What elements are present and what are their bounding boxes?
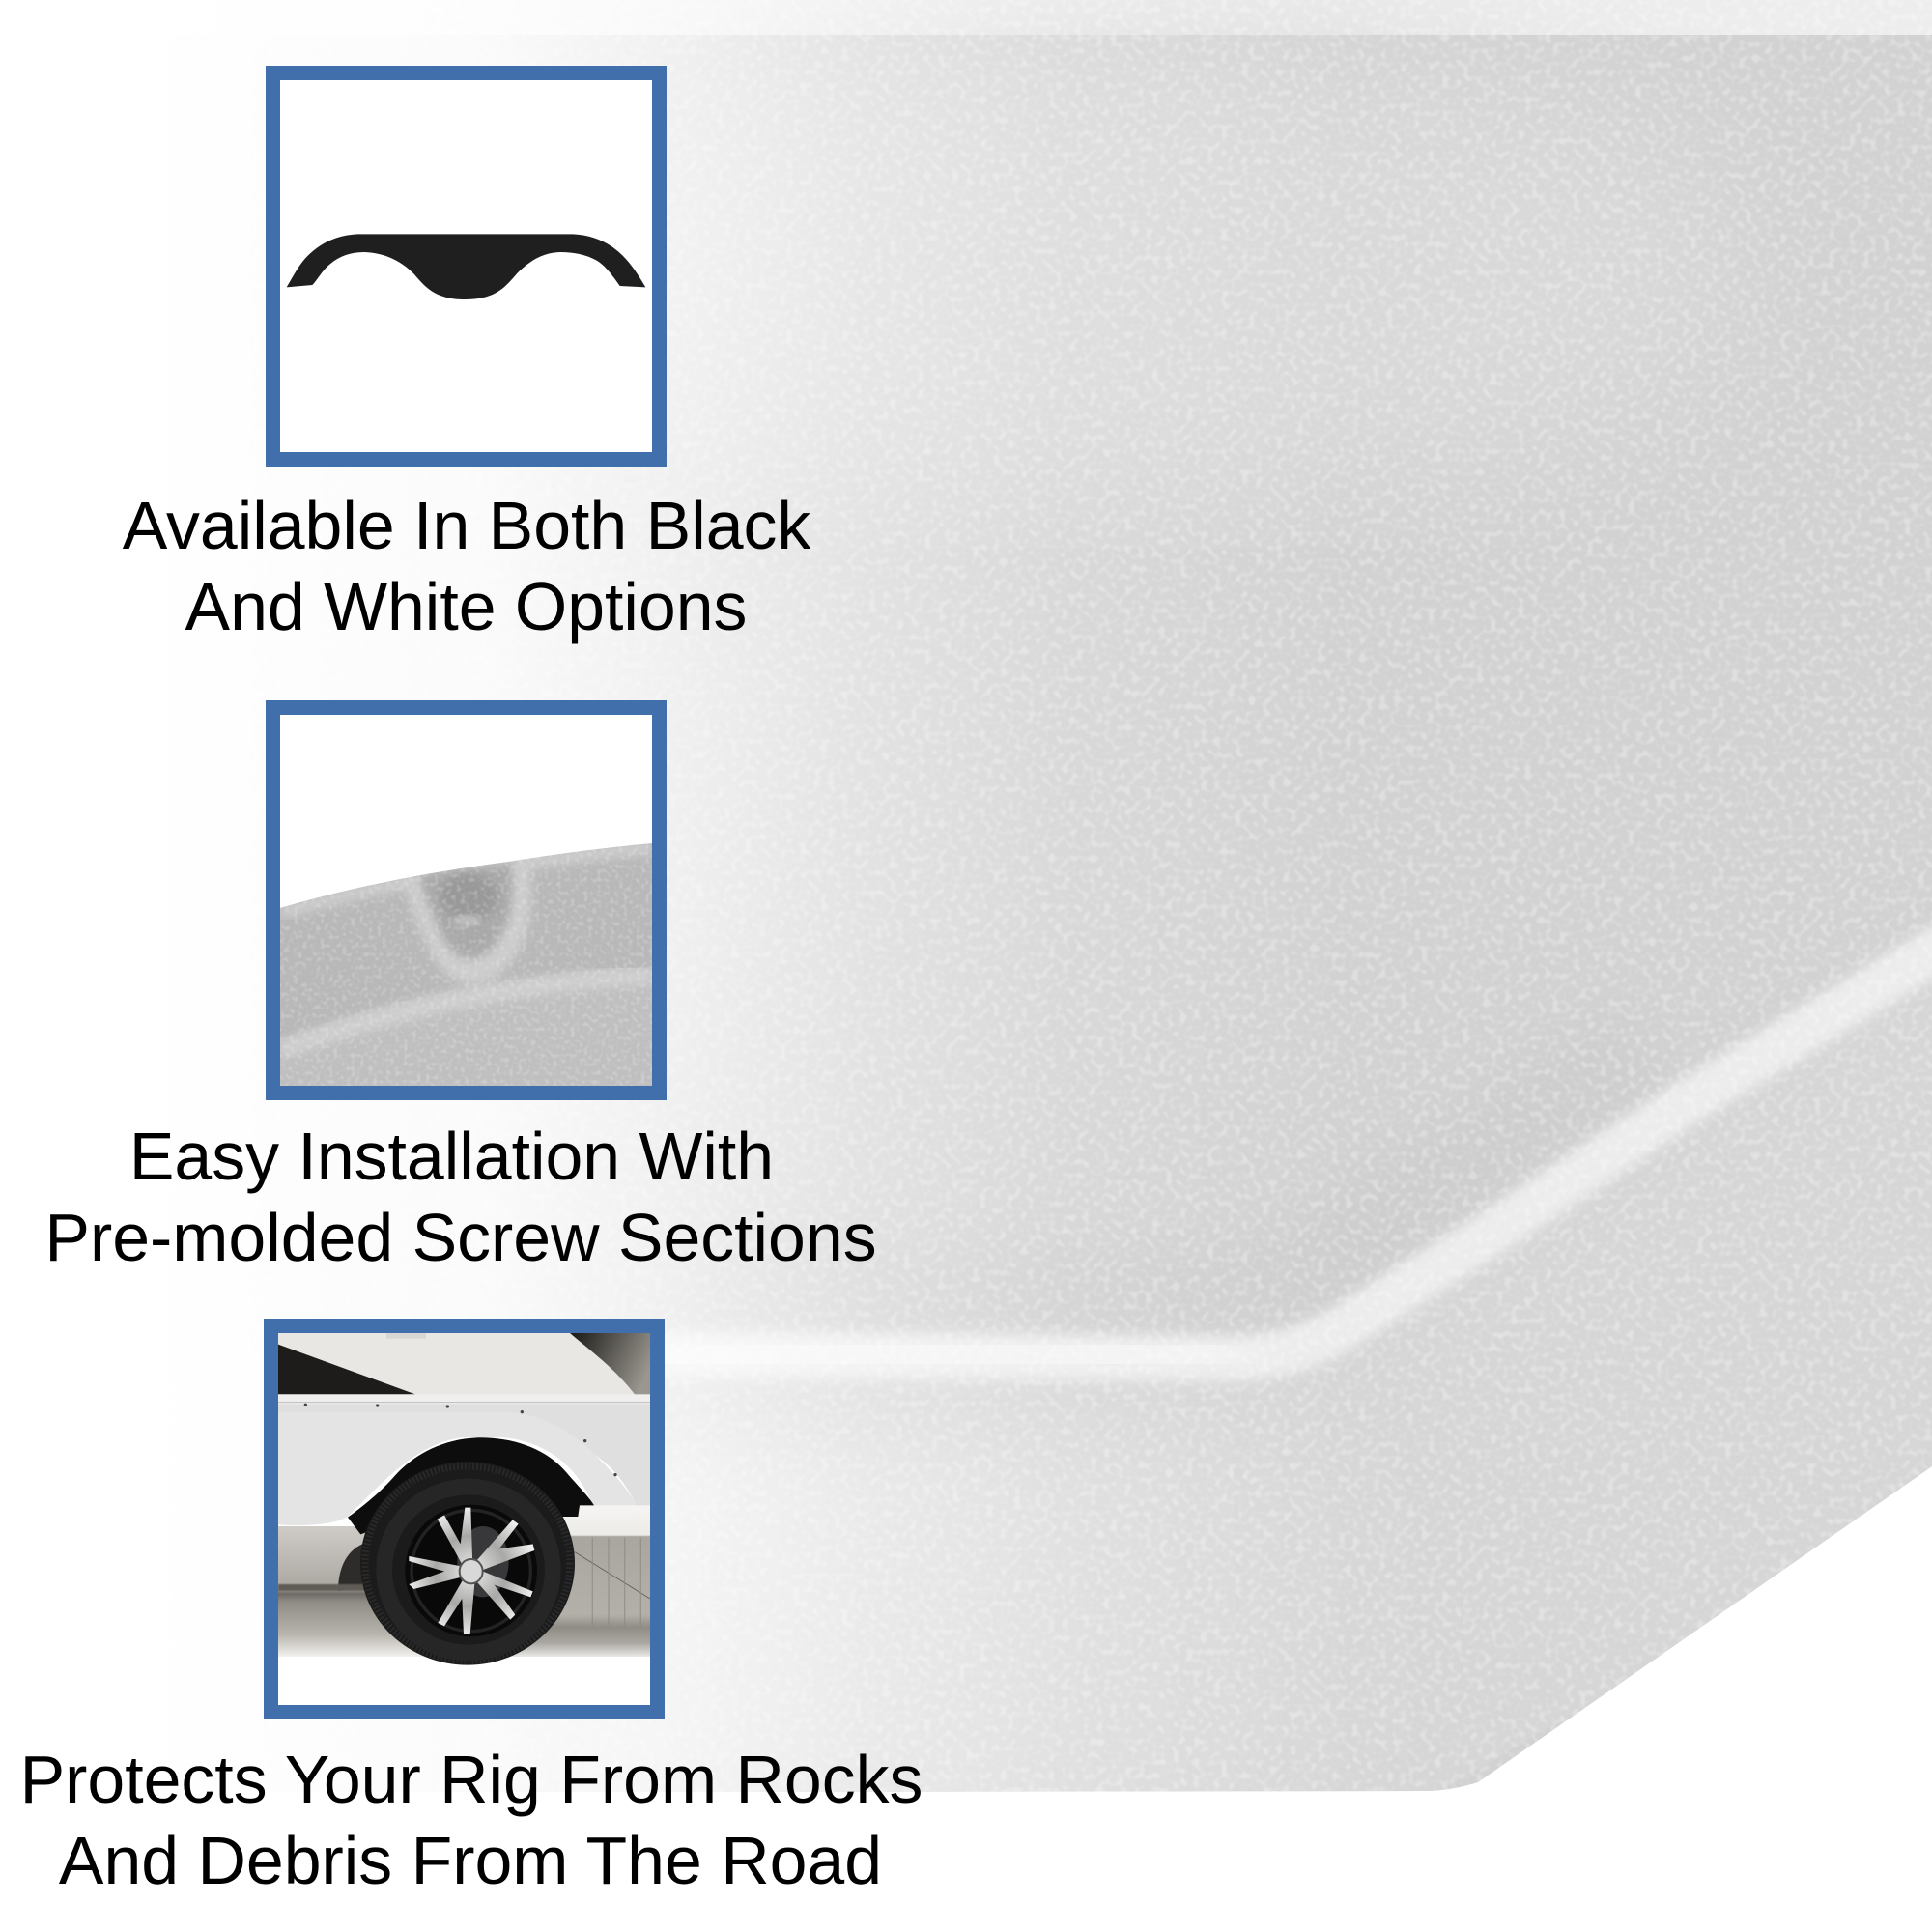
caption: installation: Pre-molded Screw Sections <box>44 1200 877 1275</box>
inset frame: screw section close-up <box>272 707 659 1094</box>
fender flare <box>355 1437 636 1509</box>
caption: installation <box>44 1119 877 1275</box>
wheel well <box>348 1437 594 1534</box>
caption: protection: Protects Your Rig From Rocks <box>20 1742 923 1817</box>
caption: protection <box>20 1742 923 1898</box>
background: textured fender close-up <box>543 0 1932 1792</box>
icon: black fender silhouette <box>287 234 645 299</box>
caption: protection: And Debris From The Road <box>59 1823 882 1898</box>
panel: easy installation <box>44 707 877 1275</box>
tire <box>360 1462 575 1665</box>
rim <box>405 1505 537 1636</box>
inset frame: wheel on trailer <box>270 1325 657 1712</box>
inset frame: black fender <box>272 73 659 460</box>
spokes <box>409 1508 534 1634</box>
icon: screw pocket <box>404 858 530 984</box>
caption: colors: Available In Both Black <box>123 488 810 563</box>
panel: protection <box>20 1325 923 1898</box>
caption: colors: And White Options <box>185 569 747 644</box>
panel: available colors <box>123 73 810 644</box>
caption: installation: Easy Installation With <box>129 1119 774 1194</box>
trailer skirt <box>278 1404 650 1505</box>
caption: colors <box>123 488 810 644</box>
